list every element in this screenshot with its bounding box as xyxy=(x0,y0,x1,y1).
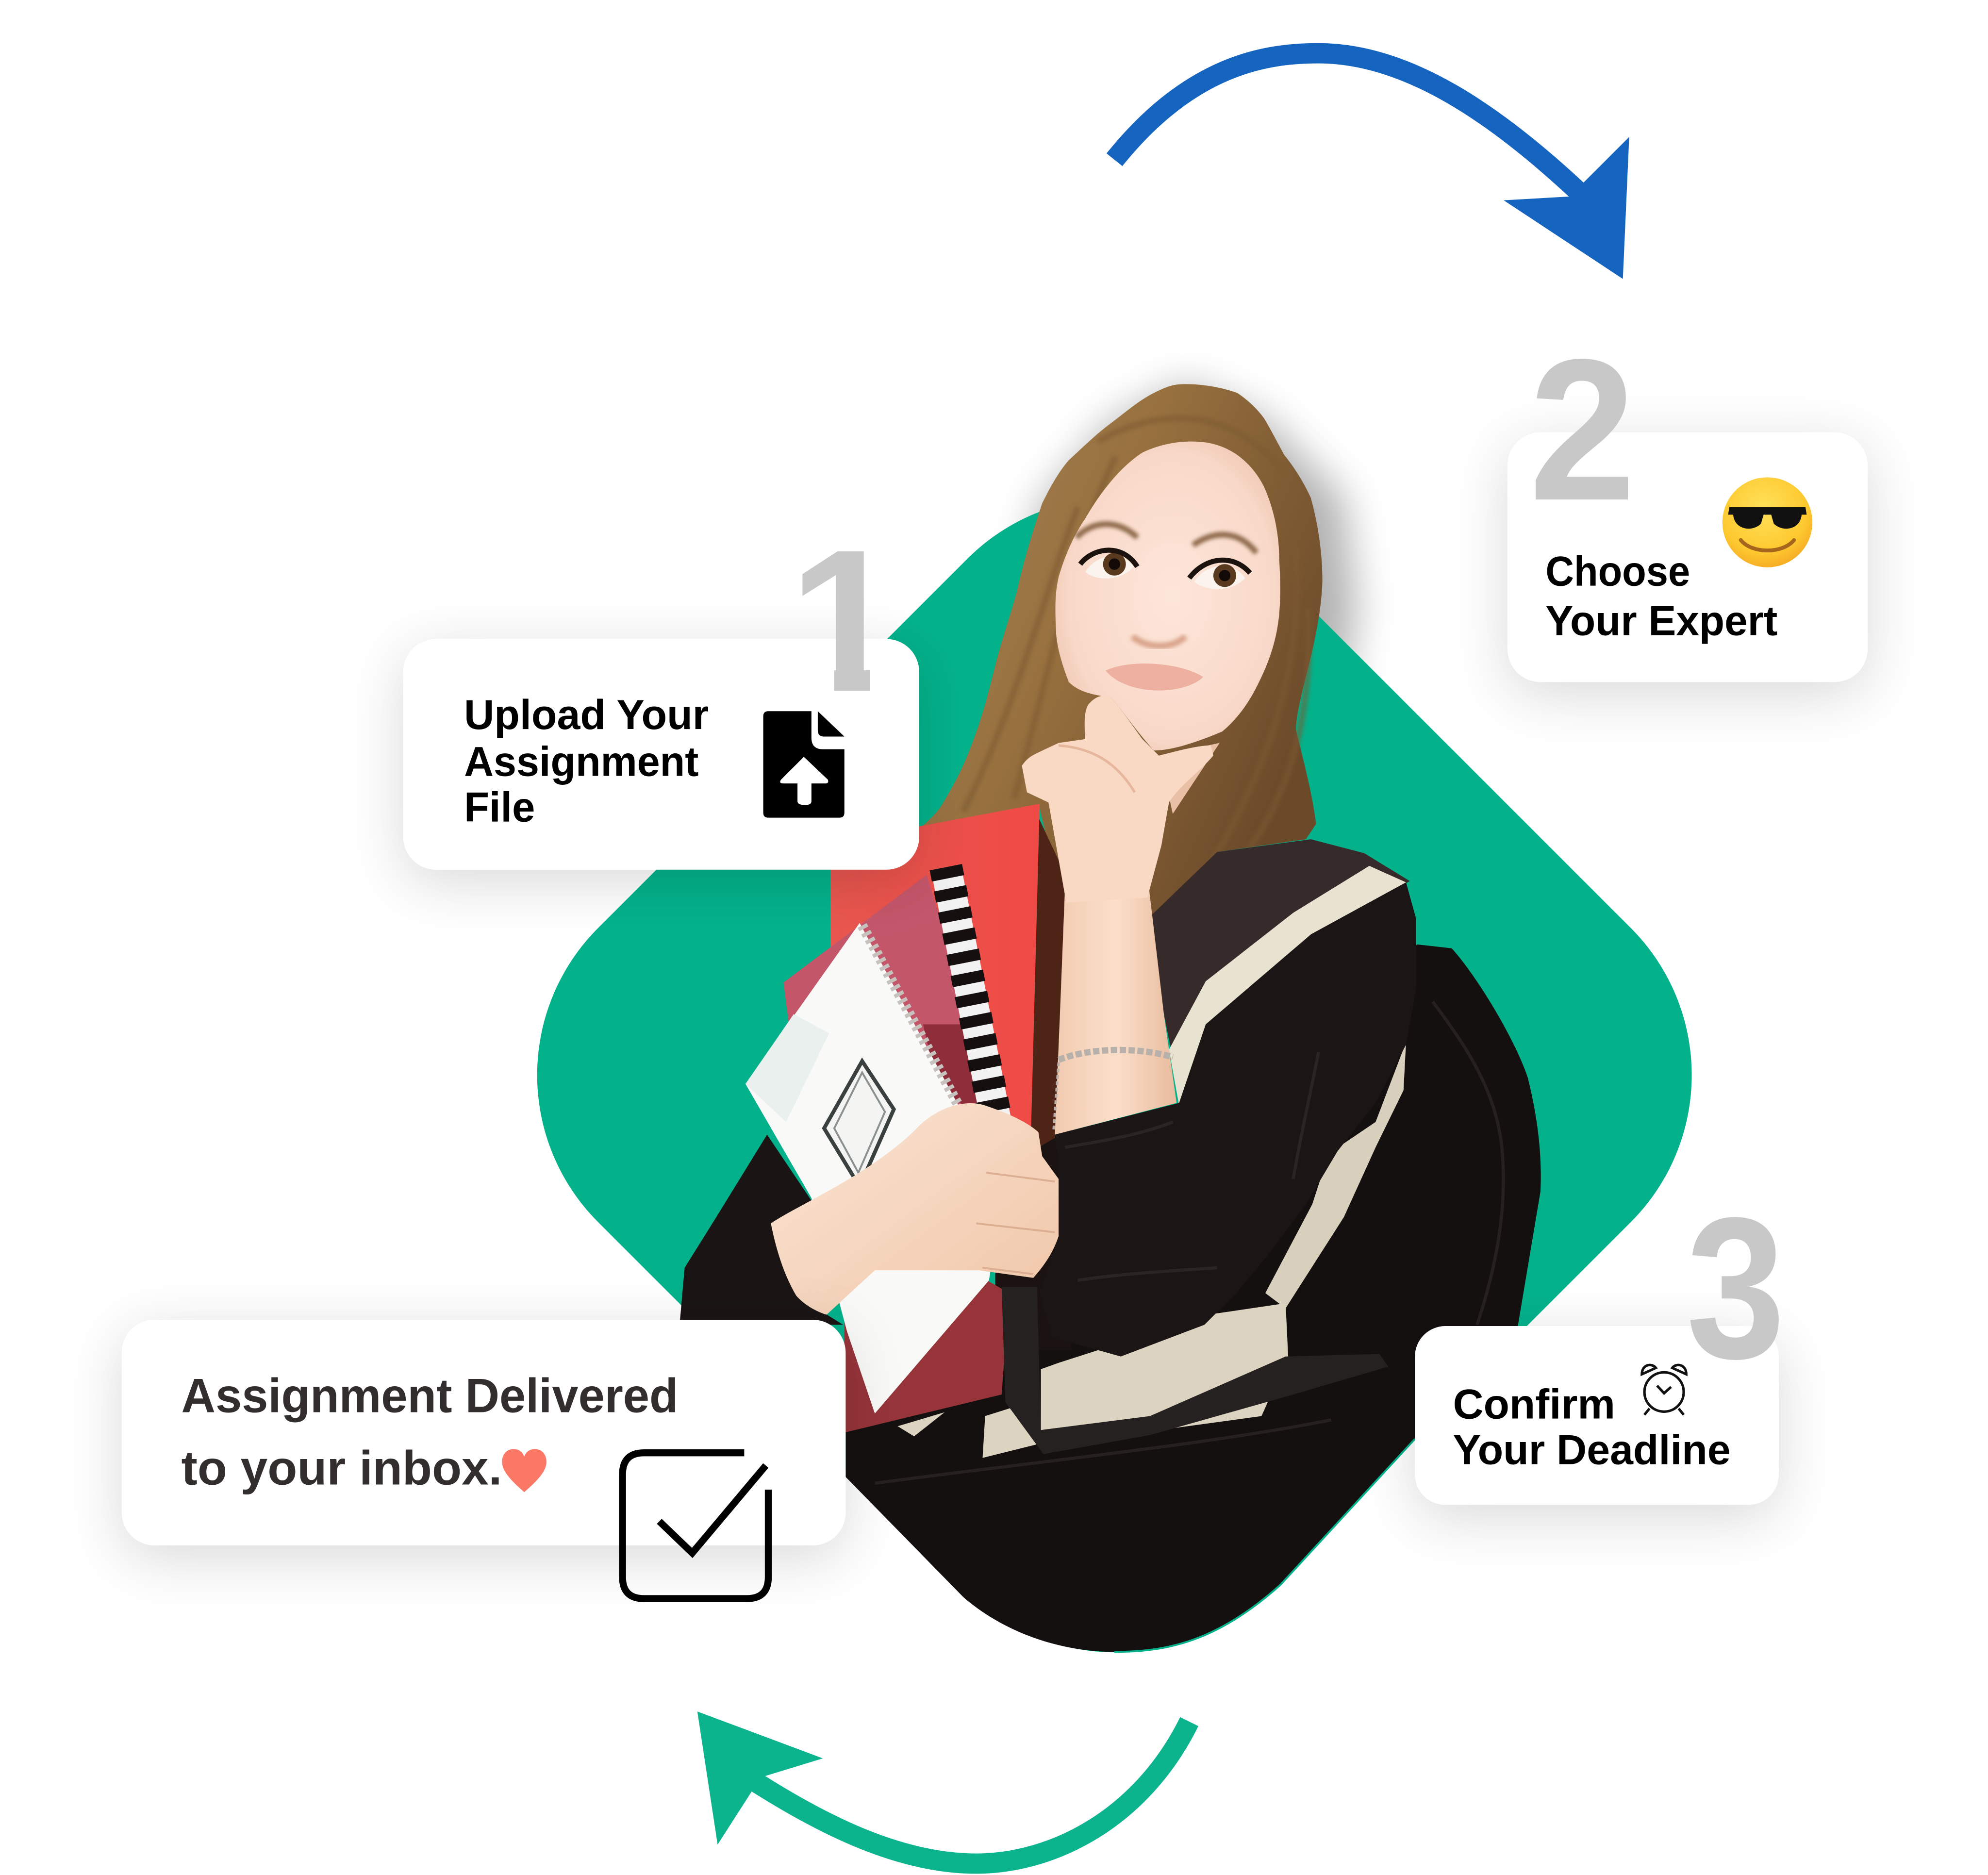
jacket sleeve xyxy=(1040,882,1416,1357)
card 1 text: File xyxy=(464,784,535,831)
card 3: deadline xyxy=(1415,1176,1785,1505)
cream shirt xyxy=(897,1303,1288,1458)
red folder xyxy=(830,804,1040,1189)
fist xyxy=(1022,696,1213,903)
card 3 text: Your Deadline xyxy=(1453,1427,1731,1474)
face xyxy=(1055,442,1280,750)
spiral binder xyxy=(946,867,996,1123)
cream vest xyxy=(1265,1042,1406,1308)
left sleeve xyxy=(679,1135,843,1325)
green rounded diamond xyxy=(451,412,1778,1739)
fill behind hand xyxy=(995,1128,1071,1350)
backpack and body xyxy=(845,945,1541,1652)
pink folder xyxy=(783,875,1008,1141)
card 2 text xyxy=(1545,548,1777,645)
black strap xyxy=(1002,1287,1388,1454)
head soft shadow xyxy=(963,384,1357,862)
hair strands xyxy=(963,418,1309,875)
icon: file upload xyxy=(763,711,845,818)
mouth xyxy=(1106,664,1203,691)
notebook xyxy=(746,923,1002,1413)
card 2: expert xyxy=(1508,317,1868,682)
card 1 text: Assignment xyxy=(464,738,698,785)
hair xyxy=(922,384,1323,923)
hair behind forearm xyxy=(1014,806,1071,1287)
neck xyxy=(1160,743,1220,814)
icon: checkbox xyxy=(623,1453,768,1599)
fist finger lines xyxy=(1059,746,1135,792)
number 2: 2 xyxy=(1529,317,1636,543)
card 3 text xyxy=(1453,1381,1731,1474)
thin diamond edge xyxy=(1114,1439,1415,1652)
right forearm xyxy=(1055,875,1176,1135)
dark shoulder xyxy=(1147,839,1410,1052)
bracelet xyxy=(1054,1050,1173,1131)
backpack detail lines xyxy=(875,1001,1504,1483)
student figure xyxy=(679,384,1541,1652)
arrow: green bottom xyxy=(697,1711,1189,1863)
sleeve wrinkles xyxy=(1065,1052,1319,1280)
card 4 text xyxy=(182,1369,679,1495)
nose xyxy=(1132,636,1185,646)
card 4 text: Assignment Delivered xyxy=(182,1369,679,1423)
card 2 text: Your Expert xyxy=(1545,598,1777,645)
number 3: 3 xyxy=(1686,1176,1785,1401)
card 4: delivered xyxy=(122,1320,845,1599)
card 4 text: to your inbox. xyxy=(182,1442,502,1495)
hugging hand xyxy=(771,1103,1059,1315)
icon: alarm clock xyxy=(1642,1365,1686,1415)
cream strap xyxy=(1169,866,1406,1106)
icon: heart xyxy=(502,1449,547,1492)
finger lines xyxy=(976,1173,1055,1274)
card 1: upload xyxy=(403,508,919,870)
card 1 text: Upload Your xyxy=(464,692,709,738)
eyebrows xyxy=(1077,524,1257,553)
dark red book xyxy=(845,1274,1009,1432)
eyes xyxy=(1080,550,1250,589)
card 1 text xyxy=(464,692,709,831)
number 1: 1 xyxy=(789,508,901,734)
pocket xyxy=(923,1024,982,1115)
icon: sunglasses emoji xyxy=(1723,477,1812,567)
arrow: blue top xyxy=(1114,53,1629,279)
card 2 text: Choose xyxy=(1545,548,1690,595)
card 3 text: Confirm xyxy=(1453,1381,1615,1428)
